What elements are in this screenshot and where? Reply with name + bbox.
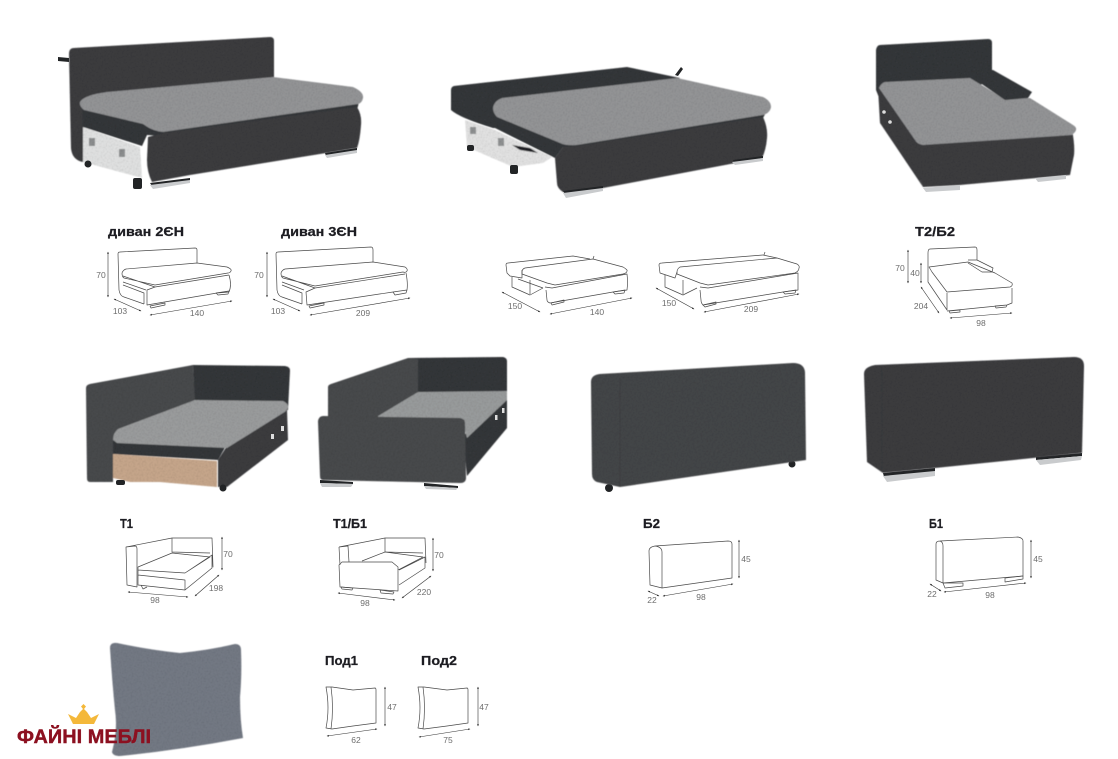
heading: Т2/Б2: Т2/Б2 [915, 224, 955, 239]
logo text: ФАЙНІ МЕБЛІ [17, 726, 151, 748]
diagram: T1 [126, 537, 233, 605]
diagram: Б1 [927, 537, 1043, 600]
diagram: Б2: 22 [647, 595, 657, 605]
diagram: Под1: 47 [387, 702, 397, 712]
diagram: T2/Б2: 98 [976, 318, 986, 328]
diagram: Б2 [647, 540, 751, 605]
photo: sofa T2/Б2 [876, 39, 1076, 192]
photo: corner T1 [86, 365, 290, 492]
diagram: 3ЄН: 70 [254, 270, 264, 280]
logo: Файні Меблі [17, 704, 151, 748]
diagram: opened 209: 150 [662, 298, 676, 308]
diagram: Под1 [326, 687, 397, 745]
diagram: 3ЄН: 103 [271, 306, 285, 316]
diagram: Под2: 47 [479, 702, 489, 712]
photo: opened sofa [451, 67, 771, 198]
heading: Т1/Б1: Т1/Б1 [333, 516, 367, 531]
diagram: T2/Б2: 204 [914, 301, 928, 311]
diagram: Б1: 22 [927, 589, 937, 599]
diagram: opened 140 [502, 256, 632, 317]
diagram: T2/Б2 [895, 247, 1012, 328]
diagram: opened 140: 150 [508, 301, 522, 311]
diagram: T1: 98 [150, 595, 160, 605]
heading: Б1: Б1 [929, 516, 943, 531]
heading: Под2: Под2 [421, 653, 457, 668]
diagram: T1: 198 [209, 583, 223, 593]
diagram: 2ЄН: 103 [113, 306, 127, 316]
diagram: 3ЄН [254, 247, 410, 318]
heading: диван 3ЄН: диван 3ЄН [281, 224, 357, 239]
diagram: T1/Б1: 220 [417, 587, 431, 597]
diagram: Б1: 45 [1033, 554, 1043, 564]
diagram: T2/Б2: 40 [910, 268, 920, 278]
diagram: Б2: 45 [741, 554, 751, 564]
diagram: 2ЄН [96, 248, 232, 318]
heading: Под1: Под1 [325, 653, 358, 668]
heading: Б2: Б2 [643, 516, 660, 531]
photo: back cushion Б1 [864, 357, 1084, 482]
diagram: T1/Б1: 70 [434, 550, 444, 560]
diagram: 3ЄН: 209 [356, 308, 370, 318]
heading: Т1: Т1 [120, 516, 133, 531]
heading: диван 2ЄН: диван 2ЄН [108, 224, 184, 239]
diagram: T2/Б2: 70 [895, 263, 905, 273]
photo: pillow [110, 643, 243, 756]
diagram: T1/Б1: 98 [360, 598, 370, 608]
diagram: T1/Б1 [338, 538, 444, 608]
diagram: Б1: 98 [985, 590, 995, 600]
photo: corner T1/Б1 [318, 357, 507, 490]
diagram: opened 209: 209 [744, 304, 758, 314]
diagram: opened 140: 140 [590, 307, 604, 317]
diagram: opened 209 [656, 252, 799, 314]
diagram: 2ЄН: 140 [190, 308, 204, 318]
diagram: 2ЄН: 70 [96, 270, 106, 280]
photo: back cushion Б2 [591, 363, 806, 492]
diagram: Под1: 62 [351, 735, 361, 745]
diagram: Под2 [418, 687, 489, 745]
diagram: Б2: 98 [696, 592, 706, 602]
icon: crown [68, 704, 99, 724]
diagram: Под2: 75 [443, 735, 453, 745]
diagram: T1: 70 [223, 549, 233, 559]
photo: sofa 2ЄН [58, 37, 363, 189]
